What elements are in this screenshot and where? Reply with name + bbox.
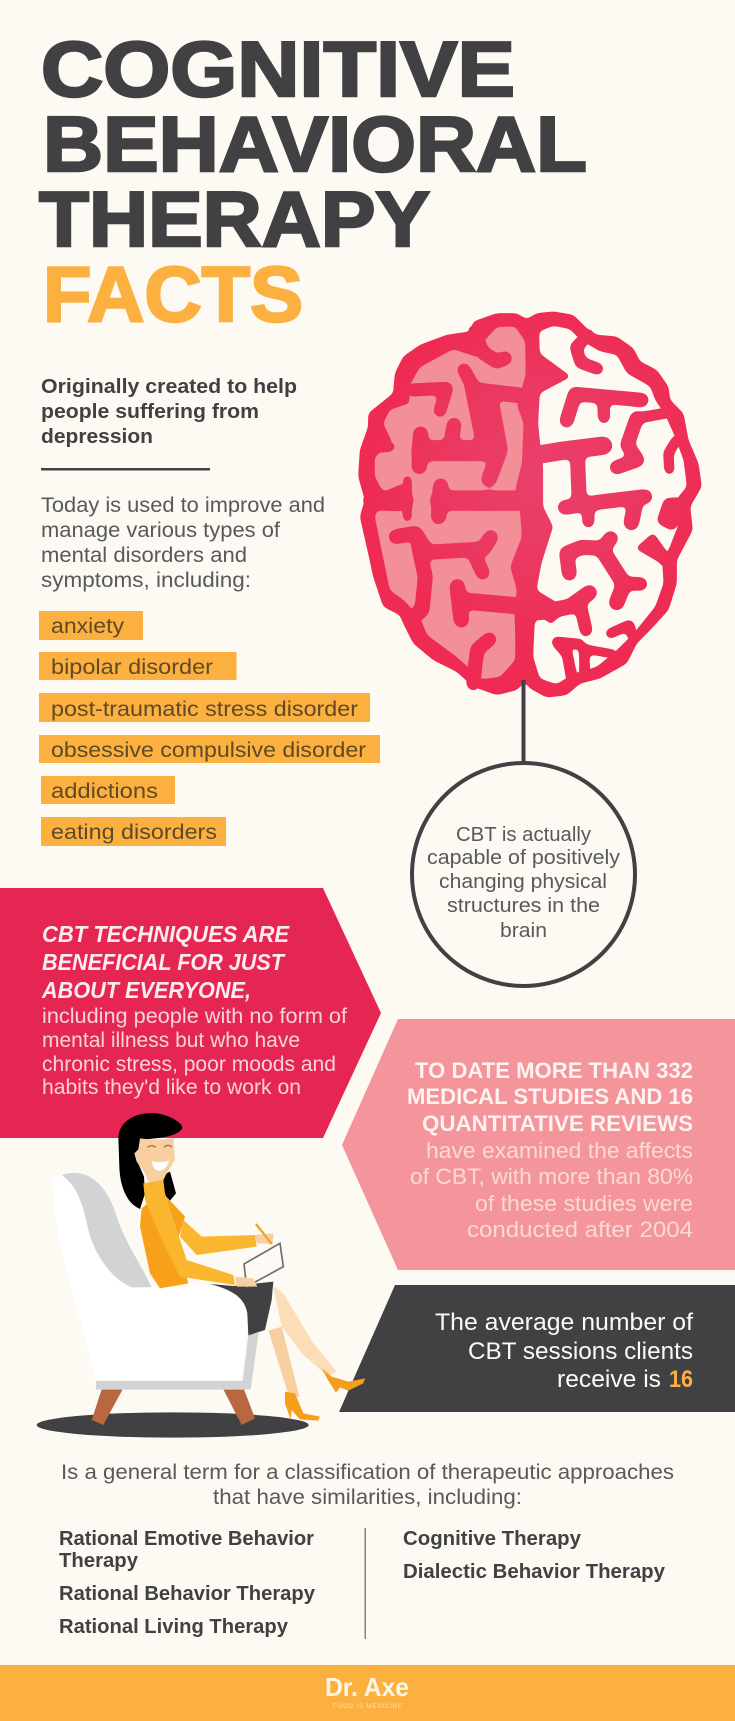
title: COGNITIVE [41,25,515,113]
left lobe [370,327,540,683]
therapy list: right column [403,1528,666,1583]
intro heading: Originally created to help [41,375,297,398]
intro text: manage various types of [41,519,280,542]
disorder tag list: obsessive compulsive disorder [51,738,366,762]
disorder tag list: anxiety [51,614,124,638]
intro text: Today is used to improve and [41,494,325,517]
disorder tag list [39,611,380,846]
panel: beneficial for everyone: mental illness but who have [42,1029,300,1052]
callout circle [412,763,635,986]
panel: medical studies: QUANTITATIVE REVIEWS [422,1111,693,1136]
footer band: FOOD IS MEDICINE [333,1704,402,1710]
disorder tag list: addictions [51,779,158,803]
panel: average sessions: receive is [557,1366,661,1393]
panel: medical studies: conducted after 2004 [467,1217,693,1242]
disorder tag list: post-traumatic stress disorder [51,697,358,721]
icon: brain [358,312,702,697]
therapy list: left column: Rational Emotive Behavior [59,1528,314,1550]
panel: average sessions: CBT sessions clients [468,1338,693,1365]
therapy list: right column: Dialectic Behavior Therapy [403,1561,666,1583]
therapy list: left column: Rational Behavior Therapy [59,1583,316,1605]
callout circle: changing physical [439,871,607,893]
intro text [41,494,325,592]
panel: beneficial for everyone: habits they'd like to work on [42,1076,301,1099]
panel: beneficial for everyone: including people with no form of [42,1005,347,1028]
title: BEHAVIORAL [43,100,587,188]
therapy list: left column: Therapy [59,1550,139,1572]
approaches intro text [61,1461,674,1509]
panel: beneficial for everyone [0,888,381,1138]
panel: beneficial for everyone: BENEFICIAL FOR JUST [42,949,286,975]
footer band [0,1665,735,1721]
panel: beneficial for everyone: ABOUT EVERYONE, [41,977,251,1003]
approaches intro text: that have similarities, including: [213,1486,522,1509]
intro heading: depression [41,425,153,448]
therapy list: left column: Rational Living Therapy [59,1616,289,1638]
therapy list: left column [59,1528,316,1638]
callout circle: brain [500,920,547,942]
intro text: mental disorders and [41,544,247,567]
callout circle: CBT is actually [456,824,591,846]
therapy list: right column: Cognitive Therapy [403,1528,582,1550]
panel: medical studies: MEDICAL STUDIES AND 16 [407,1084,693,1109]
panel: average sessions: 16 [669,1366,693,1393]
intro heading [41,375,297,448]
title: FACTS [43,250,303,338]
panel: average sessions: The average number of [435,1309,693,1336]
disorder tag list: eating disorders [51,820,217,844]
panel: medical studies: TO DATE MORE THAN 332 [415,1058,693,1083]
panel: average sessions [339,1285,735,1412]
intro heading: people suffering from [41,400,259,423]
callout circle: capable of positively [427,847,620,869]
footer band: Dr. Axe [325,1672,409,1702]
right lobe [533,326,687,684]
approaches intro text: Is a general term for a classification of therapeutic approaches [61,1461,674,1484]
title: THERAPY [39,175,430,263]
panel: medical studies [342,1019,735,1270]
panel: beneficial for everyone: chronic stress, poor moods and [42,1053,336,1076]
panel: medical studies: of these studies were [475,1191,693,1216]
illustration: woman in armchair [37,1113,365,1438]
panel: medical studies: have examined the affects [426,1138,693,1163]
intro text: symptoms, including: [41,569,251,592]
callout circle: structures in the [447,895,600,917]
title [39,25,587,338]
panel: medical studies: of CBT, with more than 80% [410,1164,693,1189]
panel: beneficial for everyone: CBT TECHNIQUES ARE [42,921,290,947]
disorder tag list: bipolar disorder [51,655,213,679]
connector line [522,680,526,763]
